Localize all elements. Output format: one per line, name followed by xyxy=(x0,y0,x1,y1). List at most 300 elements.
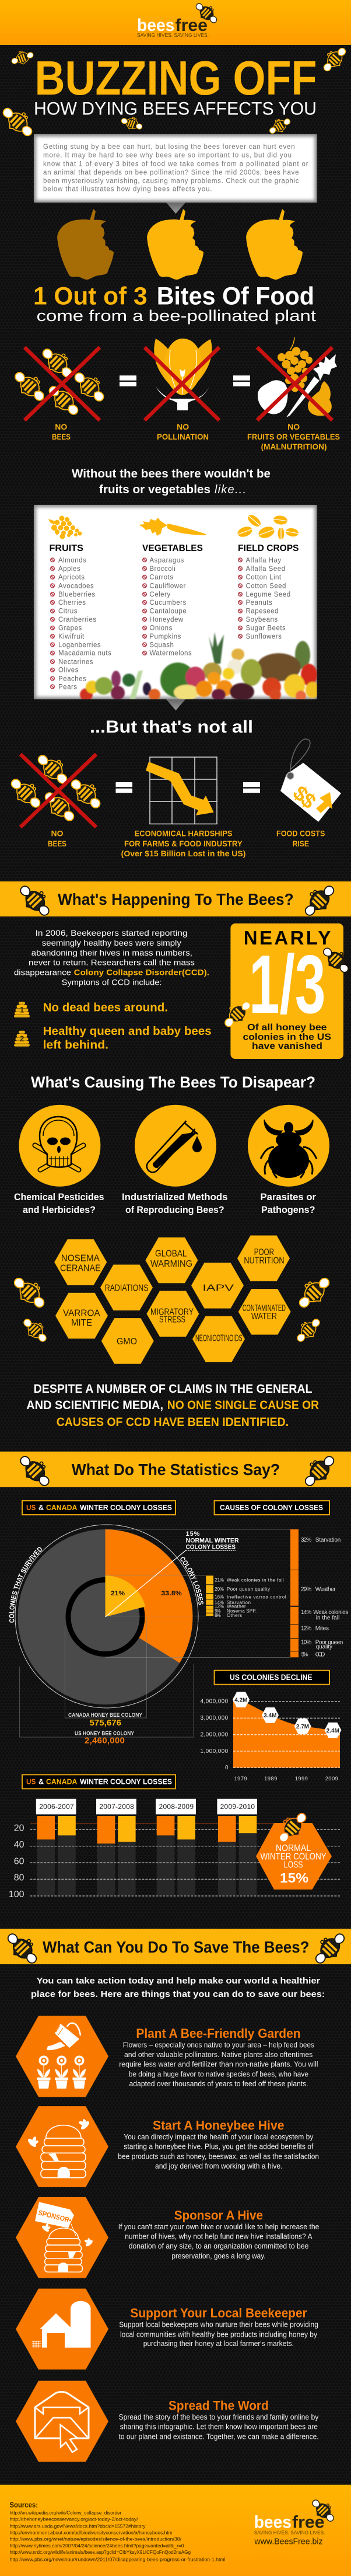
heading box: us and canada losses, bar chart: CANADA xyxy=(46,1777,78,1786)
hexagon: nosema ceranae: NOSEMA xyxy=(61,1254,100,1264)
chart: us colonies decline area: 3,000,000 xyxy=(201,1715,229,1721)
chart: stacked causes, orange: 29% xyxy=(301,1587,311,1593)
action: plant a garden xyxy=(16,2016,318,2097)
caption: Pathogens? xyxy=(261,1204,315,1215)
icon: carrot xyxy=(139,518,206,536)
bars xyxy=(37,1816,257,1843)
panel: no fruits or vegetables: NO xyxy=(287,422,300,431)
action: plant a garden: and other valuable pollinators. Native plants also oftentimes xyxy=(124,2051,313,2059)
icon: price tag: FOOD COSTS xyxy=(276,829,325,838)
list: field crops: Cotton Lint xyxy=(246,574,282,581)
action: spread the word xyxy=(16,2381,319,2462)
data point: 2.4M: 2.4M xyxy=(327,1728,339,1734)
year labels: 2007-2008 xyxy=(99,1803,134,1811)
text: colony collapse intro: Symptons of CCD include: xyxy=(62,978,162,987)
chart: stacked causes, yellow: 16% xyxy=(215,1595,224,1600)
text: colony collapse intro: disappearance xyxy=(14,968,71,977)
action: plant a garden: require less water and fertilizer than non-native plants. You will xyxy=(119,2061,318,2069)
sources list: http://www.nytimes.com/2007/04/24/science/24bees.html?pagewanted=all&_r=0 xyxy=(9,2543,184,2549)
panel: crop lists xyxy=(34,505,320,710)
year labels: 2008-2009 xyxy=(159,1803,194,1811)
section banner: what's happening xyxy=(0,879,351,921)
action: support local beekeeper: purchasing their honey at local farmer's markets. xyxy=(143,2340,294,2348)
chart: us colonies decline area: 1989 xyxy=(264,1776,278,1782)
panel: no fruits or vegetables: FRUITS OR VEGETABLES xyxy=(247,432,340,441)
icon: parasite tick xyxy=(248,1105,329,1215)
list: vegetables: Honeydew xyxy=(149,616,184,623)
chart: winter colony losses bars: 80 xyxy=(14,1873,24,1883)
heading: field crops: FIELD CROPS xyxy=(238,543,299,553)
caption xyxy=(260,1191,316,1215)
icon: skull and crossbones xyxy=(14,1105,104,1215)
list: fruits: Cranberries xyxy=(58,616,97,623)
callout: normal winter colony loss: 15% xyxy=(280,1870,308,1885)
caption: and Herbicides? xyxy=(23,1204,96,1215)
panel: intro text box: been mysteriously vanishing, causing many problems. Check out the graphic xyxy=(43,178,299,185)
label: normal winter colony losses: NORMAL WINTER xyxy=(186,1538,239,1545)
list: field crops: Peanuts xyxy=(246,599,272,606)
chart: falling economy arrow on grid: FOR FARMS & FOOD INDUSTRY xyxy=(124,839,243,848)
heading: without the bees: like... xyxy=(215,483,246,496)
data point: 3.4M xyxy=(262,1707,279,1723)
section banner: statistics xyxy=(0,1449,351,1491)
chart: stacked causes, yellow: 12% xyxy=(215,1604,224,1609)
heading box: us and canada losses xyxy=(22,1501,176,1515)
text: take action intro: You can take action today and help make our world a healthier xyxy=(37,1976,320,1986)
action: support local beekeeper: local communities with healthy bee products including honey by xyxy=(120,2330,318,2338)
sources list: http://www.ars.usda.gov/News/docs.htm?docid=15572#history xyxy=(9,2524,145,2529)
hexagon: varroa mite xyxy=(55,1293,108,1338)
action: spread the word: sharing this infographic. Let them know how important bees are xyxy=(120,2423,318,2431)
list: fruits: Almonds xyxy=(58,557,86,564)
action: spread the word: Spread The Word xyxy=(169,2398,269,2413)
action: sponsor a hive: If you can't start your own hive or would like to help increase the xyxy=(118,2223,319,2231)
chart: stacked causes, orange: Weak colonies xyxy=(313,1609,348,1616)
heading box: us and canada losses, bar chart: & xyxy=(38,1777,44,1786)
list: fruits: Citrus xyxy=(58,608,78,615)
section banner: what can you do xyxy=(0,1927,351,1969)
action: support local beekeeper: Support Your Local Beekeeper xyxy=(130,2306,307,2320)
list: fruits: Avocadoes xyxy=(58,583,94,590)
icon: barn and silo xyxy=(32,2301,91,2348)
panel: intro text box: Getting stung by a bee can hurt, but losing the bees forever can hurt even xyxy=(43,144,295,151)
year labels: 2009-2010 xyxy=(220,1803,255,1811)
callout: nearly 1/3: have vanished xyxy=(252,1041,322,1051)
panel: no bees, second row: NO xyxy=(51,829,64,838)
heading: 1 out of 3 bites xyxy=(33,283,314,311)
chart: stacked causes, yellow: Ineffective varroa control xyxy=(227,1595,286,1600)
chart: stacked causes, yellow: Poor queen quality xyxy=(227,1587,270,1592)
label: canada colonies: CANADA HONEY BEE COLONY xyxy=(68,1712,142,1718)
list: vegetables: Watermelons xyxy=(149,650,192,657)
label: us colonies: 2,460,000 xyxy=(85,1736,125,1746)
action: spread the word: to our planet and existance. Together, we can make a difference. xyxy=(119,2432,319,2441)
symptom 2 xyxy=(14,1025,212,1052)
list: fruits: Cherries xyxy=(58,599,86,606)
list: field crops: Soybeans xyxy=(246,616,278,623)
chart: winter colony losses pie: 21% xyxy=(111,1590,125,1597)
icon: envelope and cursor xyxy=(35,2392,89,2452)
label: canada colonies: 575,676 xyxy=(90,1718,121,1728)
photo: heap of fruits and vegetables xyxy=(80,632,320,701)
hexagon: neonicotinoids xyxy=(192,1316,245,1362)
callout: normal winter colony loss xyxy=(256,1807,332,1890)
heading box: causes of losses: CAUSES OF COLONY LOSSES xyxy=(220,1503,323,1512)
caption: of Reproducing Bees? xyxy=(125,1204,224,1215)
hexagon: gmo xyxy=(101,1318,154,1364)
honeycomb of possible causes xyxy=(54,1235,291,1364)
chart: stacked causes, orange: Starvation xyxy=(315,1537,341,1543)
list: fruits: Apples xyxy=(58,566,80,573)
text: colony collapse intro: seemingly healthy bees were simply xyxy=(42,939,181,947)
hexagon: global warming xyxy=(145,1238,198,1283)
action: plant a garden: adapted over thousands of years to feed off these plants. xyxy=(129,2080,308,2088)
data point: 3.4M: 3.4M xyxy=(264,1713,276,1719)
hexagon: poor nutrition: NUTRITION xyxy=(244,1256,285,1266)
list: fruits: Olives xyxy=(58,667,79,674)
heading: without the bees xyxy=(72,468,271,496)
icon: price tag: RISE xyxy=(293,839,309,848)
hexagon: varroa mite: VARROA xyxy=(63,1308,100,1318)
label: normal winter colony losses xyxy=(186,1531,239,1550)
list: field crops: Sunflowers xyxy=(246,633,282,640)
symptom 2: Healthy queen and baby bees xyxy=(43,1025,212,1038)
symptom 2: left behind. xyxy=(43,1039,108,1052)
chart: winter colony losses pie: 33.8% xyxy=(161,1590,182,1597)
chart: stacked causes, orange xyxy=(290,1529,348,1658)
equals sign xyxy=(115,782,132,793)
heading box: causes of losses xyxy=(215,1501,329,1515)
icon: watering can and flowers xyxy=(37,2023,86,2089)
chart: stacked causes, orange: Weather xyxy=(315,1587,336,1593)
list: fruits xyxy=(51,557,111,691)
hexagon: global warming: GLOBAL xyxy=(155,1249,187,1259)
hexagon: nosema ceranae xyxy=(54,1239,107,1285)
hexagon: contaminated water xyxy=(238,1289,291,1334)
list: vegetables: Broccoli xyxy=(149,566,176,573)
hexagon: radiations: RADIATIONS xyxy=(105,1284,148,1294)
icon: grapes xyxy=(48,516,82,539)
chart: winter colony losses pie xyxy=(9,1525,290,1746)
chart: falling economy arrow on grid: ECONOMICAL HARDSHIPS xyxy=(135,829,232,838)
year labels xyxy=(36,1799,257,1814)
logo wordmark: bees xyxy=(137,16,174,35)
icon: sponsored hive: SPONSOR• xyxy=(37,2208,72,2225)
chart: stacked causes, orange: in the fall xyxy=(316,1615,339,1622)
chart: winter colony losses bars: 20 xyxy=(14,1824,24,1833)
icon: seeds xyxy=(236,513,299,540)
footer logo: SAVING HIVES. SAVING LIVES. xyxy=(254,2530,325,2536)
list: fruits: Peaches xyxy=(58,675,86,682)
heading box: us and canada losses, bar chart: WINTER COLONY LOSSES xyxy=(80,1777,172,1786)
chart: winter colony losses bars: 100 xyxy=(9,1890,24,1899)
header band with logo xyxy=(0,0,351,45)
sources list: http://en.wikipedia.org/wiki/Colony_collapse_disorder xyxy=(9,2510,122,2515)
list: field crops: Sugar Beets xyxy=(246,625,286,632)
chart: stacked causes, orange: Poor queen xyxy=(315,1640,343,1646)
footer band xyxy=(0,2485,351,2576)
list: vegetables: Asparagus xyxy=(149,557,184,564)
data point: 4.2M: 4.2M xyxy=(234,1697,248,1703)
action: start a hive: starting a honeybee hive. Plus, you get the added benefits of xyxy=(124,2143,314,2151)
label: canada colonies xyxy=(68,1712,142,1728)
label: us colonies xyxy=(75,1731,134,1746)
chart: stacked causes, yellow: Weak colonies in the fall xyxy=(227,1577,284,1582)
callout: nearly 1/3: NEARLY xyxy=(244,927,331,949)
chart: stacked causes, yellow: 21% xyxy=(215,1577,224,1582)
hexagon: poor nutrition xyxy=(237,1235,290,1281)
icon: price tag: $$ xyxy=(289,780,321,813)
sources list xyxy=(9,2501,226,2562)
callout: normal winter colony loss: LOSS xyxy=(284,1860,303,1870)
chart: falling economy arrow on grid: (Over $15 Billion Lost in the US) xyxy=(121,849,246,858)
year labels: 2006-2007 xyxy=(39,1803,74,1811)
callout: nearly 1/3: Of all honey bee xyxy=(247,1023,327,1033)
list: vegetables: Celery xyxy=(149,591,171,598)
hexagon: poor nutrition: POOR xyxy=(254,1247,274,1257)
chart: us colonies decline area: 1979 xyxy=(234,1776,247,1782)
list: field crops: Cotton Seed xyxy=(246,583,286,590)
data point: 2.4M xyxy=(324,1723,341,1738)
list: field crops: Rapeseed xyxy=(246,608,279,615)
section banner: what's happening: What's Happening To The Bees? xyxy=(58,890,294,908)
list: vegetables xyxy=(143,557,192,657)
chart: stacked causes, yellow: 14% xyxy=(215,1600,224,1605)
section banner: statistics: What Do The Statistics Say? xyxy=(72,1460,280,1479)
panel: no bees xyxy=(9,342,110,441)
footer logo: www.BeesFree.biz xyxy=(254,2536,323,2546)
icon: logo bee xyxy=(192,0,222,27)
text: colony collapse intro xyxy=(14,929,209,987)
heading box: us and canada losses, bar chart xyxy=(22,1775,176,1789)
label: us colonies: US HONEY BEE COLONY xyxy=(75,1731,134,1737)
panel: intro text box: an animal that depends on bee pollination? Since the mid 2000s, bees have xyxy=(43,169,299,176)
footer logo: bees xyxy=(254,2513,292,2532)
panel: intro text box: know that 1 of every 3 bites of food we take comes from a pollinated plant or xyxy=(43,161,308,168)
icon: sponsored hive xyxy=(35,2202,94,2272)
list: fruits: Grapes xyxy=(58,625,82,632)
action: sponsor a hive: number of hives, why not help fund new hive installations? A xyxy=(125,2233,313,2241)
text: despite claims xyxy=(26,1382,319,1429)
text: colony collapse intro: never to return. Researchers call the mass xyxy=(29,958,195,967)
chart: falling economy arrow on grid xyxy=(121,757,246,858)
panel: no pollination xyxy=(145,339,219,441)
logo tagline: SAVING HIVES. SAVING LIVES. xyxy=(137,32,209,38)
list: vegetables: Cantaloupe xyxy=(149,608,187,615)
subtitle: HOW DYING BEES AFFECTS YOU xyxy=(34,98,317,119)
chart: us colonies decline area: 1999 xyxy=(295,1776,308,1782)
panel: no pollination: POLLINATION xyxy=(157,432,209,441)
panel: no pollination: NO xyxy=(177,422,189,431)
chart: stacked causes, orange: 10% xyxy=(301,1640,311,1646)
list: field crops: Alfalfa Seed xyxy=(246,566,286,573)
list: fruits: Blueberries xyxy=(58,591,96,598)
equals sign xyxy=(243,782,260,793)
hexagon: migratory stress xyxy=(146,1291,199,1337)
chart: winter colony losses bars xyxy=(9,1799,340,1899)
sources list: Sources: xyxy=(9,2501,38,2509)
heading box: us and canada losses: US xyxy=(26,1503,36,1512)
hexagon: migratory stress: MIGRATORY xyxy=(150,1307,194,1317)
action: sponsor a hive xyxy=(16,2197,319,2278)
chart: stacked causes, orange: 14% xyxy=(301,1609,311,1616)
chart: us colonies decline area xyxy=(201,1692,341,1782)
action: support local beekeeper xyxy=(16,2289,318,2369)
heading: fruits: FRUITS xyxy=(49,543,83,553)
data point: 2.7M xyxy=(294,1719,311,1734)
hexagon: gmo: GMO xyxy=(117,1337,137,1347)
chart: stacked causes, yellow: Starvation xyxy=(227,1600,251,1605)
symptom 1: No dead bees around. xyxy=(43,1002,168,1015)
heading box: us and canada losses, bar chart: US xyxy=(26,1777,36,1786)
text: despite claims: AND SCIENTIFIC MEDIA, xyxy=(26,1399,163,1412)
subheading: come from a bee-pollinated plant xyxy=(37,307,317,325)
list: fruits: Kiwifruit xyxy=(58,633,85,640)
caption: Industrialized Methods xyxy=(122,1191,227,1202)
action: sponsor a hive: preservation, goes a long way. xyxy=(171,2252,266,2260)
header band with logo: free xyxy=(175,16,208,35)
list: vegetables: Squash xyxy=(149,642,174,649)
heading: but that's not all: ...But that's not all xyxy=(90,717,253,737)
icon: price tag xyxy=(276,739,341,848)
section banner: what can you do: What Can You Do To Save The Bees? xyxy=(43,1938,309,1956)
label: normal winter colony losses: COLONY LOSSES xyxy=(186,1543,236,1550)
icon: beehive xyxy=(27,2117,90,2178)
hexagon: global warming: WARMING xyxy=(150,1259,192,1269)
data point: 2.7M: 2.7M xyxy=(296,1724,309,1730)
hexagon: neonicotinoids: NEONICOTINOIDS xyxy=(195,1334,243,1344)
panel: no fruits or vegetables: (MALNUTRITION) xyxy=(261,442,327,451)
curved label: colonies that survived: COLONIES THAT SURVIVED xyxy=(9,1547,42,1623)
chart: stacked causes, orange: quality xyxy=(316,1644,332,1650)
chart: us colonies decline area: 2009 xyxy=(325,1776,338,1782)
list: vegetables: Pumpkins xyxy=(149,633,181,640)
heading: 1 out of 3 bites: Bites Of Food xyxy=(157,283,314,311)
hexagon: iapv xyxy=(191,1263,244,1309)
text: despite claims: DESPITE A NUMBER OF CLAIMS IN THE GENERAL xyxy=(34,1382,313,1396)
hexagon: migratory stress: STRESS xyxy=(159,1315,185,1325)
hexagon: radiations xyxy=(100,1264,153,1310)
bees beside honeycomb xyxy=(9,1271,335,1346)
list: fruits: Pears xyxy=(58,684,78,691)
chart: winter colony losses bars: 40 xyxy=(14,1840,24,1850)
action: spread the word: Spread the story of the bees to your friends and family online by xyxy=(119,2413,319,2421)
action: plant a garden: be doing a huge favor to native species of bees, who have xyxy=(129,2070,308,2078)
panel: no bees, second row xyxy=(6,748,107,848)
text: take action intro xyxy=(31,1976,325,1999)
action: start a hive: You can directly impact the health of your local ecosystem by xyxy=(124,2133,314,2141)
heading box: us and canada losses: WINTER COLONY LOSSES xyxy=(80,1503,172,1512)
chart: stacked causes, yellow: Nosema SPP. xyxy=(227,1609,257,1614)
list: field crops: Alfalfa Hay xyxy=(246,557,282,564)
chart: stacked causes, orange: 12% xyxy=(301,1626,311,1632)
list: fruits: Loganberries xyxy=(58,642,101,649)
symptom 1: 1 xyxy=(20,1005,24,1015)
list: vegetables: Cauliflower xyxy=(149,583,186,590)
text: take action intro: place for bees. Here are things that you can do to save our bees: xyxy=(31,1989,325,1999)
heading: what's causing: What's Causing The Bees To Disapear? xyxy=(31,1073,315,1091)
data point: 4.2M xyxy=(233,1692,250,1707)
action: plant a garden: Plant A Bee-Friendly Garden xyxy=(136,2026,301,2041)
footer logo xyxy=(254,2495,339,2546)
action: start a hive xyxy=(16,2106,319,2187)
gridlines and axis xyxy=(30,1829,340,1896)
panel: no bees, second row: BEES xyxy=(48,839,66,848)
heading box: us colonies decline: US COLONIES DECLINE xyxy=(230,1672,313,1682)
action: sponsor a hive: Sponsor A Hive xyxy=(174,2208,263,2222)
heading: 1 out of 3 bites: 1 Out of 3 xyxy=(33,283,148,311)
hexagon: contaminated water: WATER xyxy=(251,1312,277,1322)
sources list: http://thehoneybeeconservancy.org/act-today-2/act-today/ xyxy=(9,2516,138,2522)
panel: no bees: NO xyxy=(55,422,67,431)
hexagon: nosema ceranae: CERANAE xyxy=(60,1263,101,1273)
panel: intro text box xyxy=(34,134,317,214)
panel: intro text box: more. It may be hard to see why bees are so important to us, but did you xyxy=(43,152,292,159)
symptom 1 xyxy=(14,1002,168,1017)
hexagon: contaminated water: CONTAMINATED xyxy=(243,1303,286,1313)
chart: stacked causes, yellow: 8% xyxy=(215,1613,221,1618)
heading box: us colonies decline xyxy=(215,1671,329,1685)
chart: stacked causes, orange: 32% xyxy=(301,1537,311,1543)
list: fruits: Nectarines xyxy=(58,658,93,665)
hexagon: iapv: IAPV xyxy=(202,1284,234,1294)
callout: normal winter colony loss: NORMAL xyxy=(276,1843,311,1853)
list: fruits: Apricots xyxy=(58,574,85,581)
chart: stacked causes, orange: 5% xyxy=(301,1651,308,1658)
text: despite claims: NO ONE SINGLE CAUSE OR xyxy=(167,1399,319,1412)
action: start a hive: and joy derived from working with a hive. xyxy=(155,2162,282,2170)
caption xyxy=(122,1191,227,1215)
chart: stacked causes, yellow: 9% xyxy=(215,1609,221,1614)
sources list: http://environment.about.com/od/biodiversityconservation/a/honeybees.htm xyxy=(9,2530,173,2536)
action: start a hive: bee products such as honey, beeswax, as well as the satisfaction xyxy=(118,2152,319,2160)
list: fruits: Macadamia nuts xyxy=(58,650,111,657)
chart: stacked causes, yellow: Others xyxy=(227,1613,242,1618)
list: vegetables: Carrots xyxy=(149,574,174,581)
heading: vegetables: VEGETABLES xyxy=(142,543,203,553)
caption xyxy=(14,1191,104,1215)
action: support local beekeeper: Support local beekeepers who nurture their bees while providing xyxy=(119,2321,318,2329)
list: field crops: Legume Seed xyxy=(246,591,291,598)
three apples: one bitten out of three xyxy=(57,209,303,280)
chart: us colonies decline area: 1,000,000 xyxy=(201,1748,229,1755)
heading box: us and canada losses: CANADA xyxy=(46,1503,78,1512)
text: colony collapse intro: Colony Collapse Disorder(CCD). xyxy=(74,968,209,977)
sources list: http://www.pbs.org/wnet/nature/episodes/silence-of-the-bees/introduction/38/ xyxy=(9,2537,182,2542)
curved label: colony losses: COLONY LOSSES xyxy=(180,1557,203,1605)
caption: Parasites or xyxy=(260,1191,316,1202)
decorative flying bees xyxy=(0,43,350,141)
chart: stacked causes, yellow: Weather xyxy=(227,1604,246,1609)
caption: Chemical Pesticides xyxy=(14,1191,104,1202)
text: colony collapse intro: In 2006, Beekeepers started reporting xyxy=(36,929,188,937)
chart: us colonies decline area: 0 xyxy=(225,1765,229,1771)
list: field crops xyxy=(238,557,291,640)
callout: nearly 1/3: colonies in the US xyxy=(243,1033,331,1043)
list: vegetables: Onions xyxy=(149,625,173,632)
label: normal winter colony losses: 15% xyxy=(186,1531,200,1538)
heading: without the bees: fruits or vegetables xyxy=(99,483,210,496)
action: plant a garden: Flowers – especially ones native to your area – help feed bees xyxy=(123,2041,314,2049)
panel: intro text box: below that illustrates how dying bees affects you. xyxy=(43,186,212,193)
chart: us colonies decline area: 2,000,000 xyxy=(201,1731,229,1738)
title: BUZZING OFF xyxy=(35,51,317,105)
sources list: http://www.pbs.org/newshour/rundown/2011/07/disappearing-bees-progress-or-frustration-1.html xyxy=(9,2557,226,2562)
chart: stacked causes, orange: Mites xyxy=(315,1626,329,1632)
sources list: http://www.nrdc.org/wildlife/animals/bees.asp?gclid=CIbYksyX9LICFQoFnQod2nsAGg xyxy=(9,2550,191,2555)
callout: nearly 1/3 xyxy=(219,923,351,1059)
icon: test tube xyxy=(122,1105,227,1215)
